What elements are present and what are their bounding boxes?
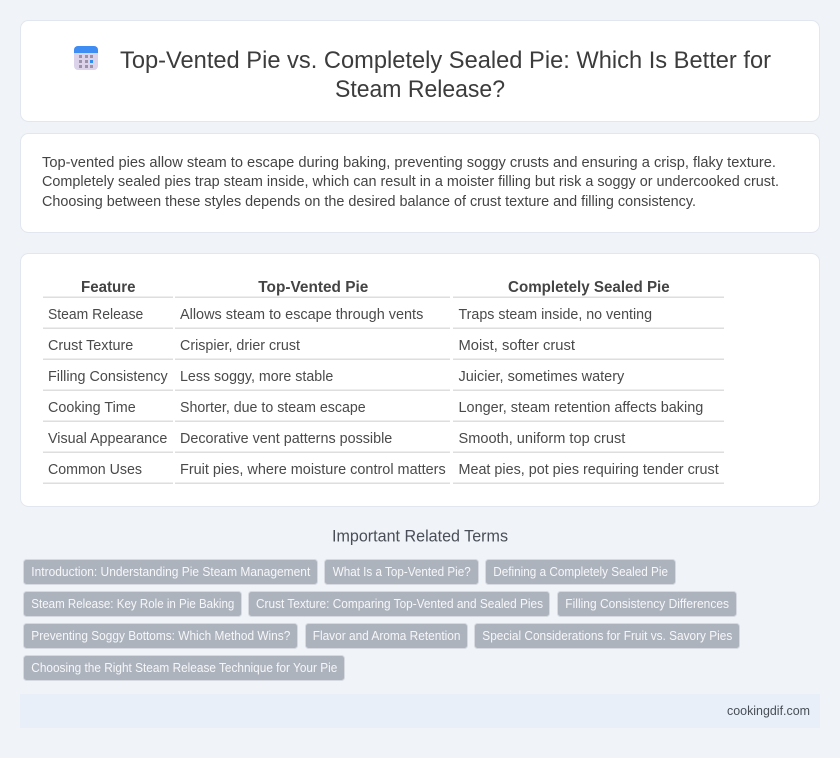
title: Steam Release? [335, 76, 505, 103]
row: cooking time: Shorter, due to steam escape [180, 400, 366, 416]
row: steam release: Steam Release [48, 307, 143, 323]
tag [24, 624, 298, 648]
row: visual appearance: Smooth, uniform top crust [458, 431, 625, 447]
tag [486, 560, 676, 584]
heading: important related terms: Important Related Terms [332, 528, 508, 546]
table header [81, 279, 670, 296]
panel: title header [20, 20, 820, 122]
icon: calendar [74, 46, 98, 70]
row: visual appearance: Decorative vent patterns possible [180, 431, 392, 447]
row: steam release [48, 307, 652, 323]
tag [24, 592, 242, 616]
row: cooking time: Cooking Time [48, 400, 136, 416]
title [120, 47, 771, 103]
row: common uses: Common Uses [48, 462, 142, 478]
row: crust texture: Crispier, drier crust [180, 338, 300, 354]
tag [248, 592, 550, 616]
tag: Defining a Completely Sealed Pie [493, 565, 668, 579]
tag group: related terms [24, 560, 740, 680]
row: filling consistency: Less soggy, more stable [180, 369, 333, 385]
row: visual appearance: Visual Appearance [48, 431, 167, 447]
tag: Steam Release: Key Role in Pie Baking [31, 597, 234, 611]
row: crust texture: Moist, softer crust [458, 338, 575, 354]
panel: description [20, 134, 820, 232]
tag: Preventing Soggy Bottoms: Which Method Wins? [31, 629, 290, 643]
tag [474, 624, 740, 648]
tag [24, 656, 344, 680]
row: filling consistency [48, 369, 625, 385]
tag: Crust Texture: Comparing Top-Vented and Sealed Pies [256, 597, 543, 611]
row: crust texture: Crust Texture [48, 338, 133, 354]
row: steam release: Allows steam to escape through vents [180, 307, 423, 323]
text block: description: Completely sealed pies trap steam inside, which can result in a moister filling but risk a soggy or undercooked crust. [42, 174, 779, 190]
footer: cookingdif.com [727, 704, 810, 718]
tag: Special Considerations for Fruit vs. Savory Pies [482, 629, 732, 643]
row: filling consistency: Juicier, sometimes watery [458, 369, 625, 385]
footer [20, 694, 820, 728]
tag [324, 560, 478, 584]
row: filling consistency: Filling Consistency [48, 369, 168, 385]
tag: Filling Consistency Differences [565, 597, 729, 611]
tag: What Is a Top-Vented Pie? [333, 565, 471, 579]
text block: description [42, 155, 779, 210]
row: steam release: Traps steam inside, no venting [458, 307, 652, 323]
title: Top-Vented Pie vs. Completely Sealed Pie: Which Is Better for [120, 47, 771, 74]
row: cooking time: Longer, steam retention affects baking [458, 400, 703, 416]
panel: comparison table [20, 254, 820, 506]
row: common uses: Fruit pies, where moisture control matters [180, 462, 446, 478]
tag: Flavor and Aroma Retention [313, 629, 461, 643]
tag: Introduction: Understanding Pie Steam Management [31, 565, 311, 579]
tag: Choosing the Right Steam Release Technique for Your Pie [31, 661, 337, 675]
table header: Feature [81, 279, 136, 296]
table header: Completely Sealed Pie [508, 279, 670, 296]
text block: description: Choosing between these styles depends on the desired balance of crust texture and filling consistency. [42, 194, 696, 210]
row: common uses [48, 462, 719, 478]
tag [306, 624, 468, 648]
row: visual appearance [48, 431, 625, 447]
row: common uses: Meat pies, pot pies requiring tender crust [458, 462, 719, 478]
table header: Top-Vented Pie [258, 279, 369, 296]
row: crust texture [48, 338, 575, 354]
row: cooking time [48, 400, 703, 416]
tag [24, 560, 318, 584]
text block: description: Top-vented pies allow steam to escape during baking, preventing soggy crusts and ensuring a crisp, flaky texture. [42, 155, 776, 171]
tag [558, 592, 736, 616]
